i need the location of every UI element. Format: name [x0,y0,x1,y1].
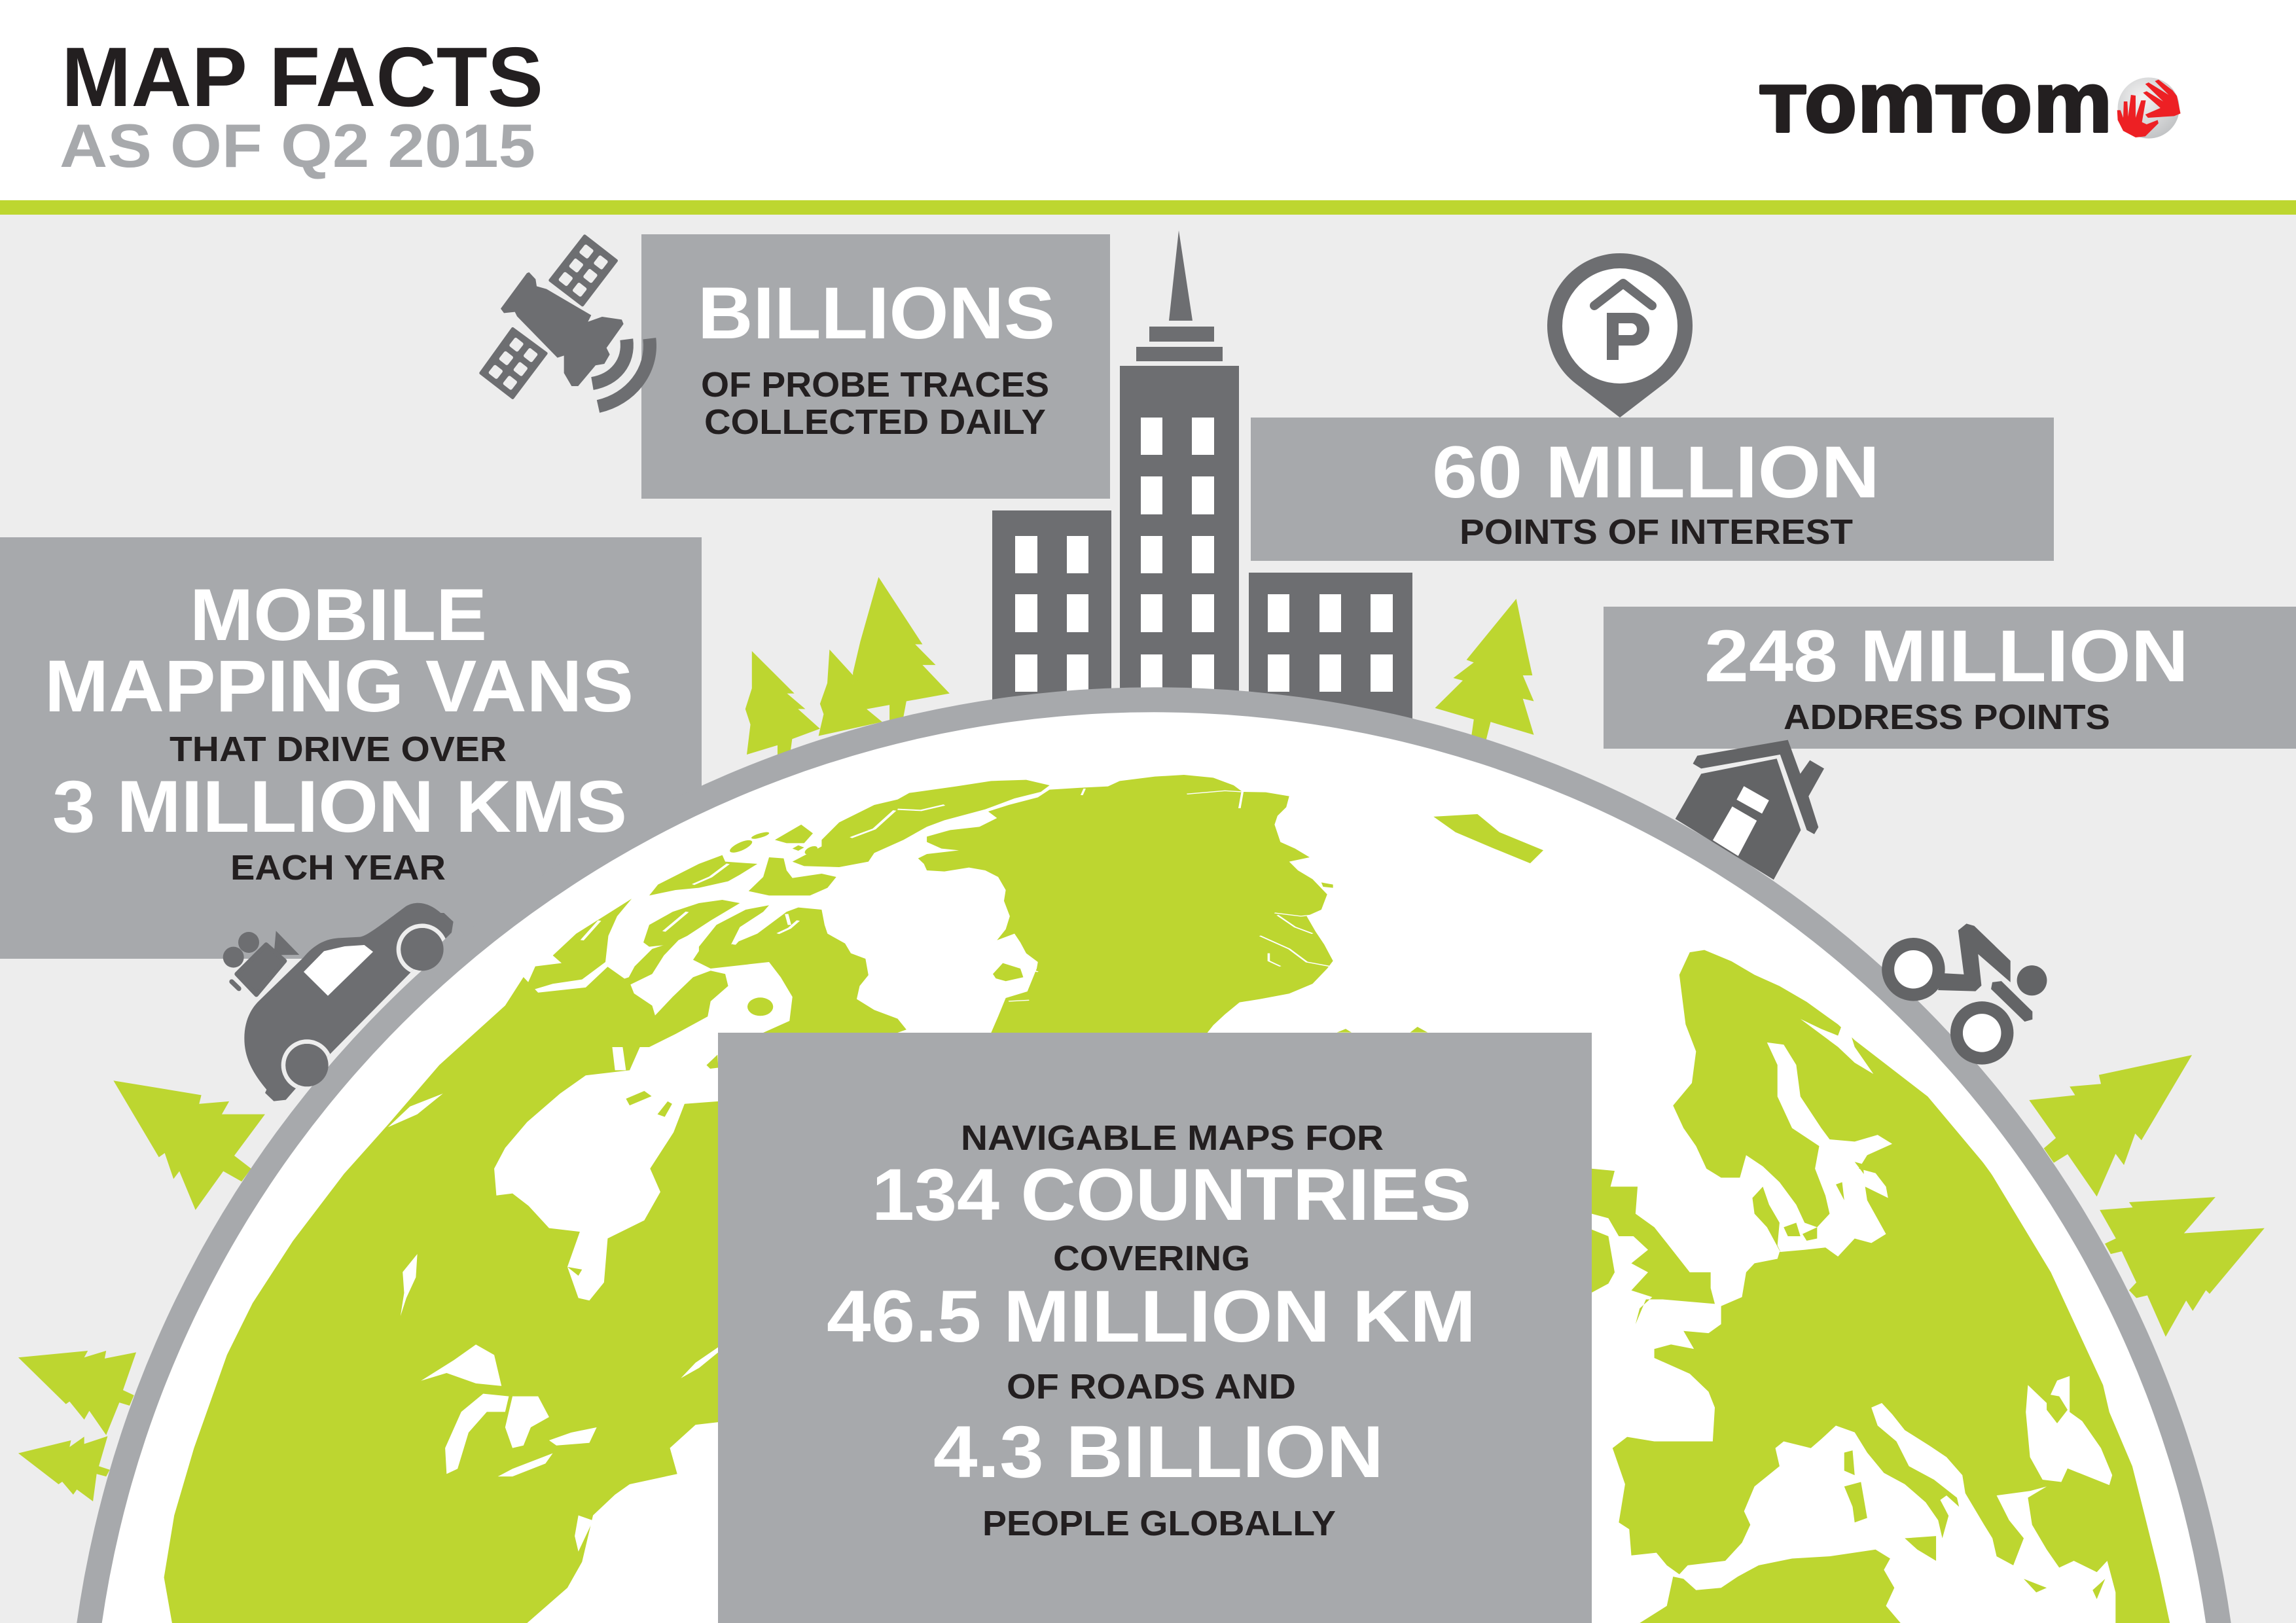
map: continents [164,775,2170,1623]
panel: 248 million address points: ADDRESS POINTS [1784,698,2110,737]
tree: right of city [1435,599,1534,745]
panel: billions of probe traces: BILLIONS [698,272,1055,354]
panel: 60 million points of interest: 60 MILLION [1432,431,1880,513]
subtitle: AS OF Q2 2015 [60,111,535,180]
TomTom logo: T [1936,73,1982,146]
icon: cyclist [1882,923,2047,1065]
trees: left of city [745,577,950,760]
globe ring [77,687,2231,1623]
map: Europe and Middle East [1592,950,2170,1623]
panel: 60 million points of interest: POINTS OF INTEREST [1460,512,1853,552]
icon: mobile mapping car with camera [223,903,454,1101]
panel: 60 million points of interest [1251,418,2054,561]
panel: billions of probe traces: OF PROBE TRACES [701,365,1049,404]
icon: satellite with signal [481,236,650,406]
left building [992,510,1111,772]
map: islands and Britain [1592,1162,2105,1599]
panel: mobile mapping vans: MAPPING VANS [45,645,634,727]
icon: house [1676,740,1824,880]
panel: navigable maps, roads and people: PEOPLE GLOBALLY [982,1504,1336,1543]
panel: 248 million address points: 248 MILLION [1704,615,2189,697]
panel: mobile mapping vans: MOBILE [190,574,487,656]
TomTom logo: o [1980,54,2032,150]
icon: location pin with parking [1547,253,1693,418]
panel: navigable maps, roads and people: COVERING [1053,1239,1250,1278]
map: North America mainland and lakes [164,967,718,1623]
map: Canadian Arctic and Greenland [524,775,1333,1047]
TomTom logo: T [1760,73,1806,146]
map: Arctic islands [524,780,1050,1047]
panel: billions of probe traces: COLLECTED DAILY [704,402,1046,442]
panel: mobile mapping vans [0,537,702,959]
map: North Africa [1640,1550,1901,1623]
title: MAP FACTS [62,30,543,124]
city buildings [992,230,1412,772]
panel: navigable maps, roads and people: 134 COUNTRIES [872,1154,1471,1236]
globe: ocean [102,712,2206,1623]
panel: navigable maps, roads and people: 46.5 MILLION KM [827,1275,1476,1357]
panel: navigable maps, roads and people: NAVIGABLE MAPS FOR [961,1118,1384,1158]
map: Greenland [918,775,1333,1033]
TomTom logo: m [2034,54,2112,150]
right building [1249,573,1412,769]
TomTom logo: o [1804,54,1857,150]
panel: 248 million address points [1604,607,2296,749]
trees: right side of globe [2029,1055,2265,1337]
TomTom logo: m [1857,54,1936,150]
TomTom logo [1760,54,2181,150]
panel: billions of probe traces [641,234,1110,499]
panel: navigable maps, roads and people: OF ROADS AND [1007,1367,1296,1406]
panel: mobile mapping vans: EACH YEAR [230,848,446,887]
header accent bar [0,200,2296,215]
panel: navigable maps, roads and people [718,1033,1592,1623]
map: Iceland and north Atlantic islands [1337,814,1543,1033]
central tower with spire [1120,230,1239,758]
panel: navigable maps, roads and people: 4.3 BILLION [933,1411,1384,1493]
map: inland seas [1801,1019,2113,1486]
panel: mobile mapping vans: THAT DRIVE OVER [170,730,507,769]
panel: mobile mapping vans: 3 MILLION KMS [52,766,627,847]
title [60,30,543,180]
trees: left side of globe [18,1080,265,1501]
